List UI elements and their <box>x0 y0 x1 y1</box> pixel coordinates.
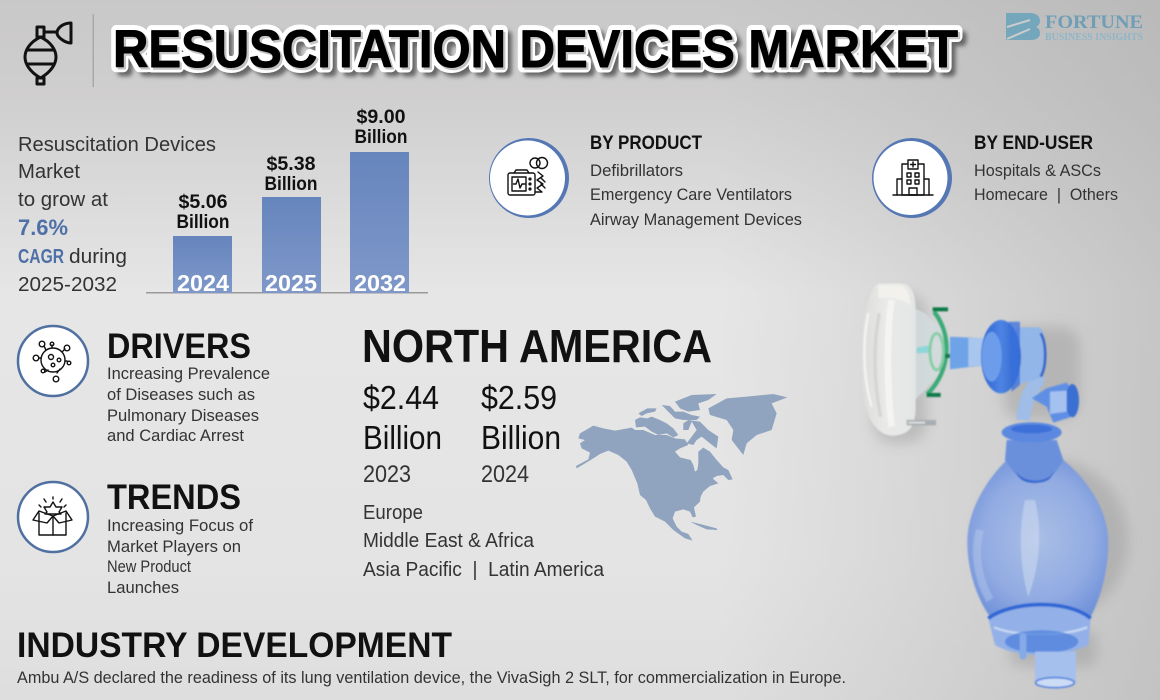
bag neck <box>1002 422 1063 483</box>
header divider <box>92 14 94 87</box>
green retaining ring <box>927 309 957 395</box>
text: market growth: Market <box>18 161 80 183</box>
bar 2032: $9.00 <box>356 107 406 128</box>
device body <box>860 283 1108 689</box>
bar 2024 <box>173 192 232 296</box>
bar 2032: 2032 <box>354 270 406 296</box>
connector tube <box>950 337 987 369</box>
logo: Fortune Business Insights <box>1006 12 1143 43</box>
text: market growth: CAGR <box>18 246 64 268</box>
icon: open box <box>18 482 88 552</box>
elbow <box>1023 377 1038 420</box>
panel: drivers: Increasing Prevalence <box>107 365 270 383</box>
panel: drivers: and Cardiac Arrest <box>107 427 244 445</box>
other regions: Middle East & Africa <box>363 530 535 552</box>
title: RESUSCITATION DEVICES MARKET <box>115 22 960 81</box>
panel: trends <box>107 478 253 597</box>
panel: north america <box>362 320 712 581</box>
panel: drivers: of Diseases such as <box>107 386 255 404</box>
2023 value: Billion <box>363 419 442 456</box>
2024 value: 2024 <box>481 461 529 488</box>
bar 2024: Billion <box>176 212 230 233</box>
panel: trends: Market Players on <box>107 538 241 556</box>
title: RESUSCITATION DEVICES MARKET <box>113 20 958 79</box>
panel: drivers: DRIVERS <box>107 327 251 366</box>
panel: trends: New Product <box>107 558 191 576</box>
text: market growth <box>18 134 216 296</box>
2024 value: $2.59 <box>481 379 557 416</box>
panel: trends: Launches <box>107 579 179 597</box>
mask cushion <box>860 283 945 436</box>
text: market growth: 7.6% <box>18 215 68 240</box>
bar 2025: 2025 <box>265 270 317 296</box>
logo: Fortune Business Insights: BUSINESS INSIGHTS <box>1045 32 1143 43</box>
title: RESUSCITATION DEVICES MARKET <box>118 25 963 84</box>
side port <box>1032 383 1079 423</box>
bar chart <box>146 107 428 296</box>
bar 2032 <box>350 107 409 296</box>
text: market growth: during <box>69 246 127 268</box>
text: industry development detail: Ambu A/S declared the readiness of its lung ventilation device, the VivaSigh 2 SLT, for commercialization in Europe. <box>17 668 846 687</box>
header icon: resuscitator bag <box>25 23 71 84</box>
text: market growth: to grow at <box>18 189 108 211</box>
other regions <box>363 502 605 581</box>
bar 2025: $5.38 <box>266 154 316 175</box>
2023 value <box>363 379 442 488</box>
photo: resuscitator bag and mask <box>860 283 1128 689</box>
other regions: Europe <box>363 502 423 524</box>
panel: by product: Defibrillators <box>590 161 683 180</box>
panel: trends: TRENDS <box>107 478 241 517</box>
panel: by product <box>590 133 802 229</box>
panel: by end-user <box>974 133 1118 204</box>
panel: trends: Increasing Focus of <box>107 517 253 535</box>
2024 value: Billion <box>481 419 561 456</box>
2024 value <box>481 379 561 488</box>
bar 2025 <box>262 154 321 296</box>
valve <box>981 320 1045 393</box>
outlet tube <box>1035 652 1076 689</box>
device shadow <box>873 293 1128 667</box>
panel: drivers: Pulmonary Diseases <box>107 407 259 425</box>
panel: by end-user: BY END-USER <box>974 133 1093 154</box>
panel: by end-user: Hospitals & ASCs <box>974 161 1101 180</box>
panel: drivers <box>107 327 270 445</box>
panel: north america: NORTH AMERICA <box>362 320 712 372</box>
bar 2025: Billion <box>264 174 318 195</box>
map: north america <box>576 394 787 541</box>
text: market growth: Resuscitation Devices <box>18 134 216 156</box>
heading: industry development: INDUSTRY DEVELOPMENT <box>17 626 452 665</box>
2023 value: $2.44 <box>363 379 439 416</box>
panel: by end-user: Homecare | Others <box>974 185 1118 204</box>
title: RESUSCITATION DEVICES MARKET <box>113 20 958 79</box>
bar 2024: $5.06 <box>178 192 228 213</box>
bag base collar <box>988 602 1091 659</box>
logo: Fortune Business Insights: FORTUNE <box>1045 12 1143 33</box>
2023 value: 2023 <box>363 461 411 488</box>
text: market growth: 2025-2032 <box>18 274 117 296</box>
bag body <box>967 460 1108 617</box>
icon: virus <box>18 326 88 396</box>
other regions: Asia Pacific | Latin America <box>363 559 605 581</box>
panel: by product: BY PRODUCT <box>590 133 702 154</box>
bar 2032: Billion <box>354 127 408 148</box>
panel: by product: Emergency Care Ventilators <box>590 185 792 204</box>
panel: by product: Airway Management Devices <box>590 210 802 229</box>
icon: hospital <box>872 138 952 218</box>
icon: defibrillator <box>489 138 569 218</box>
bar 2024: 2024 <box>177 270 229 296</box>
